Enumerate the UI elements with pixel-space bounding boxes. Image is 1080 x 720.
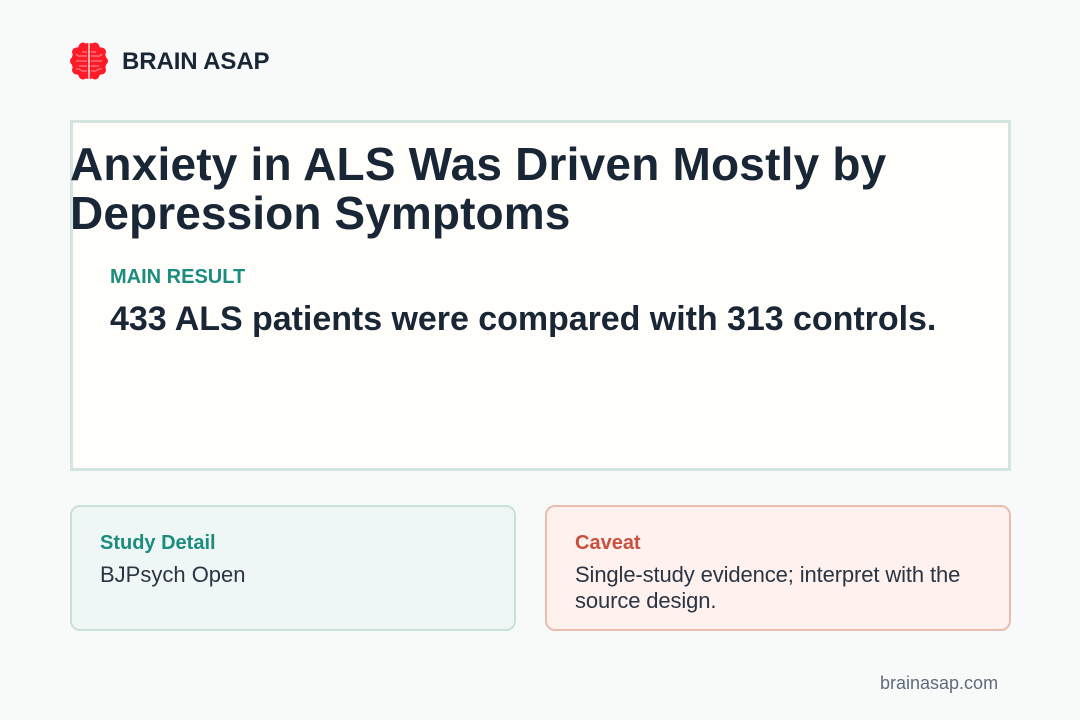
title — [70, 138, 886, 239]
icon: red brain — [70, 42, 108, 80]
main panel — [70, 120, 1011, 471]
title: Depression Symptoms — [70, 187, 570, 239]
caveat text: source design. — [575, 588, 716, 613]
header: logo and brand — [70, 42, 269, 80]
panel: study detail — [70, 505, 516, 631]
study detail text: BJPsych Open — [100, 562, 246, 587]
caveat text: Single-study evidence; interpret with the — [575, 562, 960, 587]
title: Anxiety in ALS Was Driven Mostly by — [70, 138, 886, 190]
caveat heading: Caveat — [575, 532, 641, 554]
label: main result: MAIN RESULT — [110, 266, 245, 288]
study detail heading: Study Detail — [100, 532, 216, 554]
footer url: brainasap.com — [880, 673, 998, 693]
brand name: BRAIN ASAP — [122, 48, 269, 75]
main result statement: 433 ALS patients were compared with 313 controls. — [110, 300, 936, 338]
caveat text — [575, 562, 960, 613]
panel: caveat — [545, 505, 1011, 631]
